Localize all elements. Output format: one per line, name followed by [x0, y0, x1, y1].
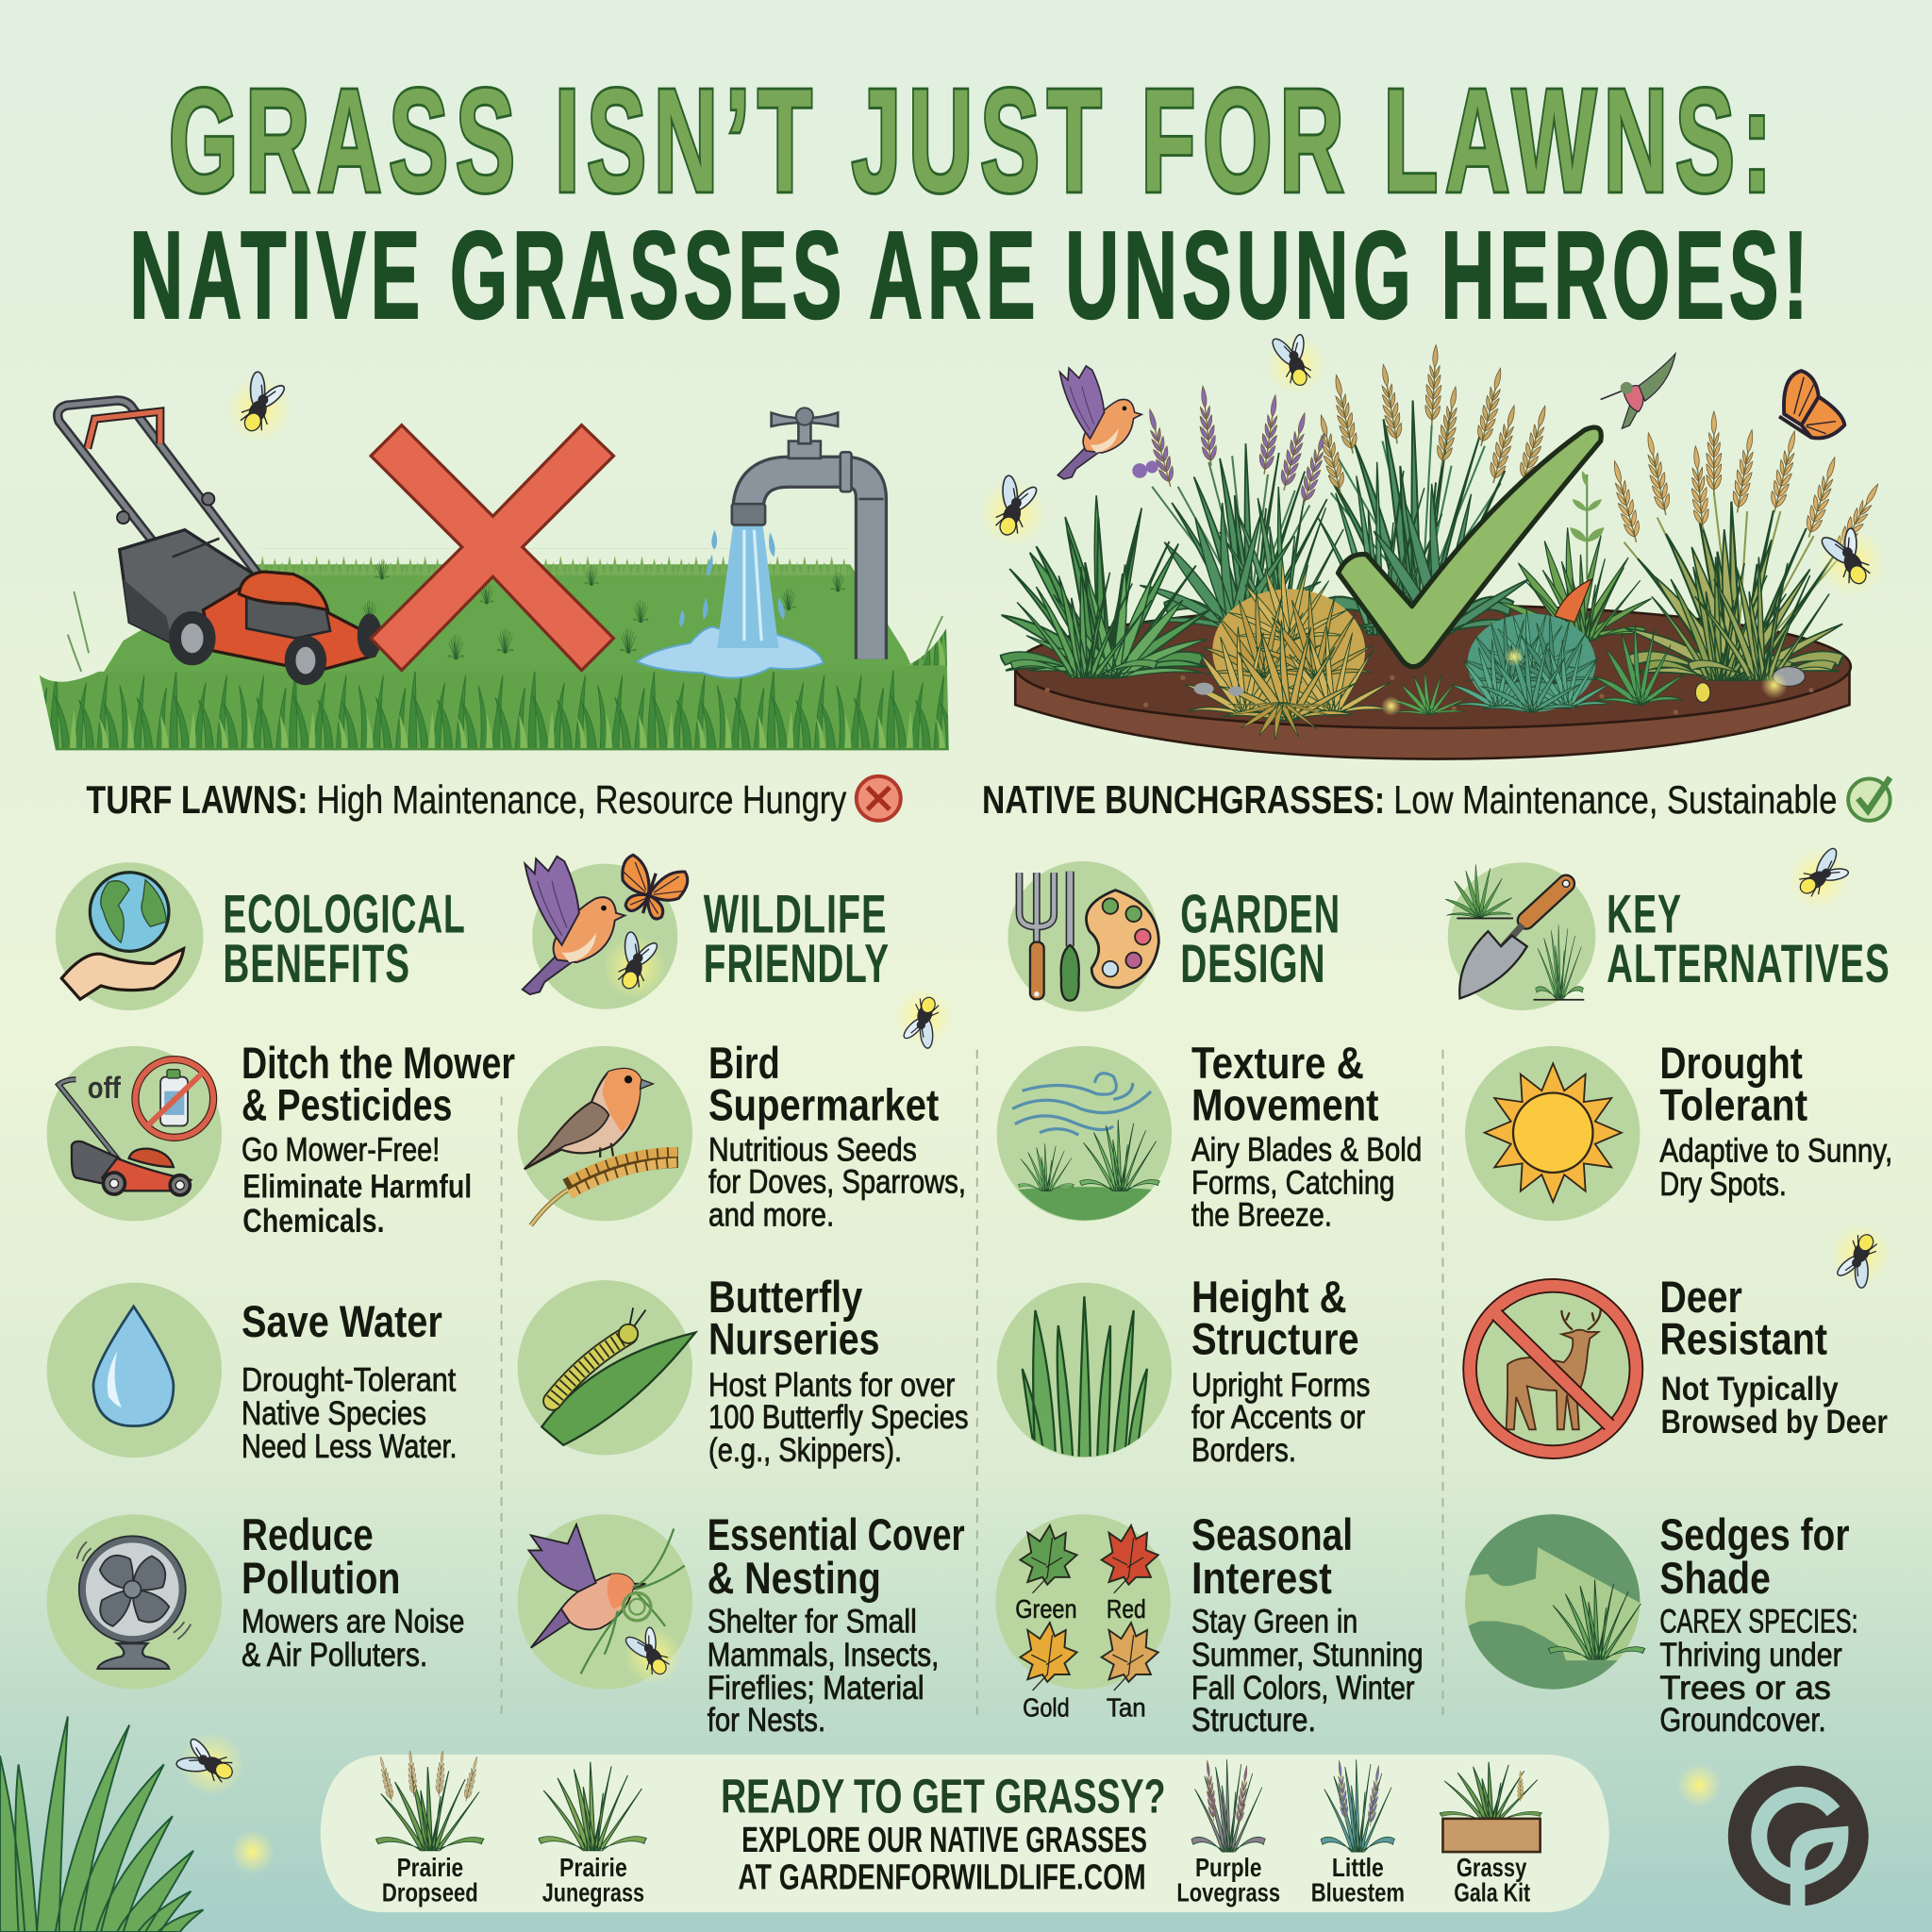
- item: seasonal interest: Structure.: [1191, 1702, 1316, 1739]
- icon: water drop: [93, 1307, 174, 1426]
- icon: faucet: [732, 408, 883, 659]
- column dividers: [502, 1050, 1442, 1719]
- item: essential cover: Essential Cover: [708, 1509, 965, 1559]
- item: bird supermarket: [518, 1038, 966, 1234]
- item: ditch the mower: Ditch the Mower: [242, 1038, 515, 1088]
- teal mound grass: [1451, 608, 1611, 712]
- item: ditch the mower: Go Mower-Free!: [242, 1131, 440, 1168]
- call to action text: AT GARDENFORWILDLIFE.COM: [738, 1857, 1146, 1897]
- item: butterfly nurseries: Butterfly: [708, 1272, 862, 1322]
- item: texture and movement: Forms, Catching: [1191, 1165, 1395, 1202]
- item: essential cover: for Nests.: [708, 1702, 825, 1739]
- icon: four leaves: [1020, 1525, 1158, 1690]
- right golden clump: [1607, 411, 1884, 680]
- item: ditch the mower: Chemicals.: [242, 1203, 385, 1240]
- item: texture and movement: Texture &: [1191, 1038, 1364, 1088]
- item: reduce pollution: Mowers are Noise: [242, 1604, 464, 1641]
- leaf colour labels: Tan: [1107, 1692, 1146, 1722]
- item: bird supermarket: for Doves, Sparrows,: [708, 1163, 966, 1200]
- icon: water: [637, 515, 823, 678]
- comparison caption: turf: High Maintenance, Resource Hungry: [317, 777, 846, 822]
- call to action banner: [321, 1751, 1609, 1912]
- call to action text: EXPLORE OUR NATIVE GRASSES: [741, 1821, 1147, 1860]
- section header: ecological benefits: ECOLOGICAL: [223, 885, 466, 945]
- icon: mower off and no pesticide: off: [88, 1070, 121, 1105]
- comparison caption: turf: TURF LAWNS:: [86, 777, 308, 822]
- item: height and structure: [997, 1272, 1370, 1469]
- icon: red X: [371, 425, 613, 671]
- item: save water: Native Species: [242, 1395, 426, 1432]
- comparison caption: native: Low Maintenance, Sustainable: [1393, 777, 1837, 822]
- item: seasonal interest: Fall Colors, Winter: [1191, 1670, 1415, 1707]
- comparison caption: native: NATIVE BUNCHGRASSES:: [982, 777, 1385, 822]
- item: drought tolerant: Dry Spots.: [1659, 1166, 1787, 1203]
- item: seasonal interest: Interest: [1191, 1553, 1332, 1603]
- lavender clump: [1132, 385, 1349, 628]
- product: prairie junegrass: Junegrass: [542, 1877, 644, 1907]
- icon: bird with nesting material: [528, 1524, 692, 1695]
- product: purple lovegrass: Lovegrass: [1176, 1877, 1280, 1907]
- comparison caption: native: [982, 777, 1890, 822]
- icon: wind and grass: [998, 1074, 1172, 1230]
- item: seasonal interest: Stay Green in: [1191, 1604, 1357, 1641]
- icon: caterpillar on leaf: [541, 1307, 695, 1445]
- check mark: [1338, 427, 1601, 667]
- corner grass: [0, 1716, 204, 1932]
- item: drought tolerant: Drought: [1659, 1038, 1803, 1088]
- item: height and structure: for Accents or: [1191, 1399, 1365, 1436]
- item: sedges for shade: Trees or as: [1659, 1670, 1831, 1707]
- call to action text: [721, 1769, 1166, 1897]
- item: save water: Need Less Water.: [242, 1428, 458, 1465]
- section header: key alternatives: [1445, 862, 1890, 1010]
- item: height and structure: Borders.: [1191, 1432, 1296, 1469]
- item: save water: Save Water: [242, 1296, 442, 1346]
- panel: native garden illustration: [970, 325, 1896, 759]
- product: prairie dropseed: Prairie: [397, 1853, 463, 1882]
- item: essential cover: Shelter for Small: [708, 1604, 917, 1641]
- item: deer resistant: Deer: [1659, 1272, 1742, 1322]
- product: grassy gala kit: Grassy: [1457, 1853, 1527, 1882]
- section header: ecological benefits: [56, 862, 466, 1010]
- item: bird supermarket: Supermarket: [708, 1079, 940, 1129]
- icon: bird, butterfly, firefly: [523, 853, 691, 1008]
- product: little bluestem: Bluestem: [1311, 1877, 1405, 1907]
- item: ditch the mower: & Pesticides: [242, 1079, 452, 1129]
- product: prairie junegrass: Prairie: [559, 1853, 627, 1882]
- logo: [1728, 1766, 1869, 1907]
- item: height and structure: Structure: [1191, 1313, 1359, 1363]
- section header: garden design: GARDEN: [1180, 885, 1341, 945]
- icon: upright blades: [1023, 1296, 1147, 1464]
- item: deer resistant: Browsed by Deer: [1661, 1404, 1888, 1441]
- item: sedges for shade: Sedges for: [1659, 1509, 1849, 1559]
- item: drought tolerant: Tolerant: [1659, 1079, 1807, 1129]
- item: ditch the mower: Eliminate Harmful: [242, 1169, 472, 1206]
- section header: wildlife friendly: WILDLIFE: [704, 885, 887, 945]
- panel: turf lawn illustration: [40, 400, 949, 749]
- icon: trowel and plants: [1445, 864, 1584, 1000]
- icon: X badge: [857, 776, 901, 821]
- icon: mower off and no pesticide: [58, 1059, 213, 1195]
- item: height and structure: Upright Forms: [1191, 1367, 1370, 1404]
- raised bed: [1015, 605, 1851, 759]
- product: prairie dropseed: Dropseed: [382, 1877, 478, 1907]
- item: seasonal interest: [995, 1509, 1424, 1739]
- item: drought tolerant: [1465, 1038, 1892, 1221]
- tan mound grass: [1185, 559, 1391, 740]
- leaf colour labels: [1015, 1594, 1146, 1722]
- icon: sun: [1485, 1063, 1622, 1202]
- icon: globe: [90, 873, 169, 951]
- item: sedges for shade: CAREX SPECIES:: [1659, 1604, 1858, 1641]
- item: sedges for shade: [1464, 1507, 1858, 1739]
- fireflies and glows bottom: [166, 1720, 1722, 1874]
- product: grassy gala kit: [1440, 1762, 1541, 1907]
- icon: hand: [61, 949, 184, 999]
- title: [129, 58, 1812, 344]
- product: little bluestem: [1311, 1759, 1405, 1907]
- leaf colour labels: Gold: [1023, 1692, 1070, 1722]
- icon: bird on seed head: [525, 1069, 678, 1225]
- item: essential cover: & Nesting: [708, 1553, 881, 1603]
- item: reduce pollution: Pollution: [242, 1553, 400, 1603]
- item: butterfly nurseries: 100 Butterfly Species: [708, 1399, 969, 1436]
- item: essential cover: [518, 1509, 965, 1739]
- item: reduce pollution: Reduce: [242, 1509, 374, 1559]
- item: seasonal interest: Summer, Stunning: [1191, 1637, 1424, 1674]
- icon: fork, chisel and palette: [1019, 872, 1158, 1001]
- product: prairie junegrass: [539, 1762, 646, 1907]
- item: height and structure: Height &: [1191, 1272, 1347, 1322]
- section header: garden design: DESIGN: [1180, 934, 1325, 994]
- item: butterfly nurseries: Host Plants for over: [708, 1367, 955, 1404]
- item: essential cover: Mammals, Insects,: [708, 1637, 939, 1674]
- item: reduce pollution: [47, 1509, 464, 1690]
- right shrub: [1497, 471, 1651, 641]
- item: bird supermarket: and more.: [708, 1197, 834, 1234]
- item: sedges for shade: Thriving under: [1659, 1637, 1842, 1674]
- section header: garden design: [1008, 861, 1341, 1011]
- icon: lawn mower: [58, 400, 382, 685]
- call to action text: READY TO GET GRASSY?: [721, 1769, 1166, 1823]
- icon: sedge under tree shade: [1464, 1507, 1645, 1695]
- product: prairie dropseed: [376, 1751, 484, 1907]
- item: essential cover: Fireflies; Material: [708, 1670, 924, 1707]
- section header: wildlife friendly: FRIENDLY: [704, 934, 890, 994]
- item: butterfly nurseries: (e.g., Skippers).: [708, 1432, 902, 1469]
- item: drought tolerant: Adaptive to Sunny,: [1659, 1133, 1892, 1170]
- product: purple lovegrass: Purple: [1195, 1853, 1261, 1882]
- comparison caption: turf: [86, 776, 901, 822]
- roaming fireflies: [887, 835, 1901, 1297]
- product: little bluestem: Little: [1332, 1853, 1384, 1882]
- icon: check badge: [1848, 777, 1890, 821]
- item: sedges for shade: Shade: [1659, 1553, 1771, 1603]
- item: deer resistant: Not Typically: [1661, 1371, 1839, 1407]
- item: texture and movement: the Breeze.: [1191, 1197, 1332, 1234]
- item: save water: Drought-Tolerant: [242, 1362, 456, 1399]
- section header: wildlife friendly: [523, 853, 890, 1009]
- item: deer resistant: [1469, 1272, 1888, 1452]
- product: grassy gala kit: Gala Kit: [1454, 1877, 1530, 1907]
- product: purple lovegrass: [1176, 1759, 1280, 1907]
- item: seasonal interest: Seasonal: [1191, 1509, 1353, 1559]
- item: bird supermarket: Bird: [708, 1038, 780, 1088]
- item: deer resistant: Resistant: [1659, 1313, 1827, 1363]
- birds and insects: [970, 325, 1896, 607]
- leaf colour labels: Green: [1015, 1594, 1077, 1624]
- small plants: [1194, 624, 1805, 716]
- item: reduce pollution: & Air Polluters.: [242, 1637, 427, 1674]
- firefly near mower: [214, 362, 305, 454]
- icon: no deer: [1470, 1286, 1636, 1452]
- section header: key alternatives: KEY: [1607, 885, 1682, 945]
- icon: fan: [76, 1536, 191, 1669]
- item: butterfly nurseries: [518, 1272, 969, 1469]
- item: bird supermarket: Nutritious Seeds: [708, 1131, 917, 1168]
- leaf colour labels: Red: [1107, 1594, 1146, 1624]
- center wheat grass: [1312, 344, 1552, 635]
- item: sedges for shade: Groundcover.: [1659, 1702, 1826, 1739]
- item: texture and movement: [997, 1038, 1422, 1234]
- item: save water: [47, 1283, 458, 1465]
- item: texture and movement: Movement: [1191, 1079, 1379, 1129]
- section header: ecological benefits: BENEFITS: [223, 934, 410, 994]
- item: butterfly nurseries: Nurseries: [708, 1313, 880, 1363]
- lawn: [40, 548, 949, 749]
- item: ditch the mower: [47, 1038, 515, 1240]
- item: texture and movement: Airy Blades & Bold: [1191, 1131, 1422, 1168]
- left green clump: [1001, 495, 1209, 677]
